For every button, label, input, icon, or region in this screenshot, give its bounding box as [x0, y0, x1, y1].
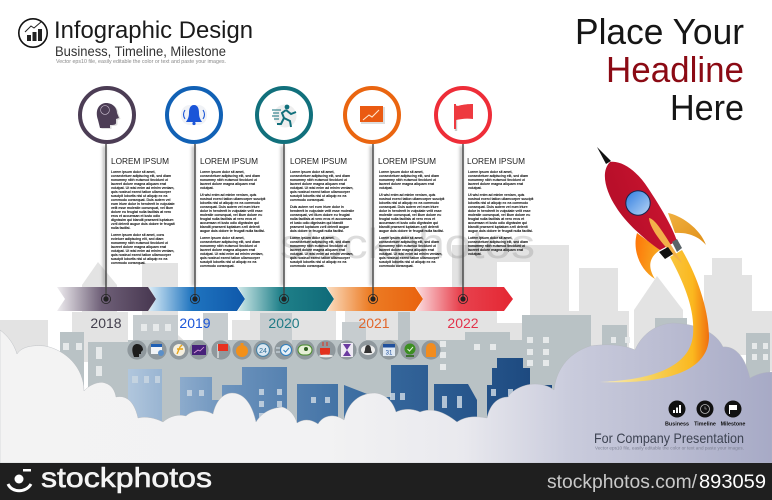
arrow 2020	[238, 287, 334, 311]
body text: Lorem ipsum dolor sit amet, consectetuer adipiscing elit, sed diam nonummy nibh euismod tincidunt ut laoreet dolore magna aliquam erat volutpat.	[379, 170, 439, 190]
background: light city skyline	[0, 245, 772, 380]
rocket flame	[600, 250, 709, 382]
year: 2022	[447, 315, 479, 331]
heading: LOREM IPSUM	[200, 157, 258, 166]
body text: Lorem ipsum dolor sit amet, consectetuer adipiscing elit, sed diam nonummy nibh euismod tincidunt ut laoreet dolore magna aliquam erat volutpat. Ut wisi enim ad minim veniam, quis nostrud exerci tation ullamcorper suscipit lobortis nisl ut aliquip ex ea commodo consequat. Duis autem vel eum iriure dolor in hendrerit in vulputate velit esse molestie consequat, vel illum dolore eu feugiat nulla facilisis at vero eros et accumsan et iusto odio dignissim qui blandit praesent luptatum zzril delenit augue duis dolore te feugait nulla facilisi.	[111, 170, 175, 230]
bottom-right badges	[665, 400, 745, 428]
heading: LOREM IPSUM	[378, 157, 436, 166]
rocket black nozzle	[659, 247, 673, 259]
timeline badge	[696, 400, 714, 418]
year: 2021	[358, 315, 390, 331]
ring	[436, 88, 490, 142]
marker	[368, 294, 378, 304]
arrow 2022	[416, 287, 513, 311]
year: 2018	[90, 315, 122, 331]
headline	[575, 11, 744, 128]
icon glyphs	[132, 342, 436, 358]
pole	[372, 144, 374, 299]
marker	[101, 294, 111, 304]
milestone 2021	[345, 88, 445, 331]
footer image id: 893059	[699, 472, 766, 493]
title: Infographic Design	[54, 17, 253, 44]
body text: Lorem ipsum dolor sit amet, consectetuer adipiscing elit, sed diam nonummy nibh euismod tincidunt ut laoreet dolore magna aliquam erat volutpat. Ut wisi enim ad minim veniam, quis nostrud exerci tation ullamcorper suscipit lobortis nisl ut aliquip ex ea commodo consequat.	[379, 236, 442, 268]
icon glyphs: 31	[386, 350, 393, 356]
ring	[257, 88, 311, 142]
headline: Place Your	[575, 11, 744, 52]
badge labels: Milestone	[721, 422, 745, 428]
pole shadows	[103, 146, 463, 286]
body text: Duis autem vel eum iriure dolor in hendrerit in vulputate velit esse molestie consequat, vel illum dolore eu feugiat nulla facilisis at vero eros et accumsan et iusto odio dignissim qui blandit praesent luptatum zzril delenit augue duis dolore te feugait nulla facilisi.	[290, 205, 354, 233]
year: 2019	[179, 315, 211, 331]
rocket centre fin	[649, 218, 682, 263]
ring	[167, 88, 221, 142]
icon: chart board	[360, 106, 385, 124]
arrow 2018	[57, 287, 156, 311]
background: blue foreground buildings	[128, 358, 552, 434]
rocket window	[626, 191, 650, 215]
badge labels: Timeline	[694, 422, 716, 428]
background: blue building windows	[132, 376, 513, 419]
rocket grey nozzle	[672, 239, 682, 252]
footer bar	[0, 462, 772, 500]
footer logo mark	[8, 469, 31, 491]
milestone badge	[724, 400, 742, 418]
marker	[458, 294, 468, 304]
body text: Lorem ipsum dolor sit amet, consectetuer adipiscing elit, sed diam nonummy nibh euismod tincidunt ut laoreet dolore magna aliquam erat volutpat. Ut wisi enim ad minim veniam, quis nostrud exerci tation ullamcorper suscipit lobortis nisl ut aliquip ex ea commodo consequat.	[290, 236, 353, 268]
body text	[200, 170, 266, 270]
icon badges	[127, 340, 441, 360]
body text	[468, 170, 534, 260]
body text: Lorem ipsum dolor sit amet, consectetuer adipiscing elit, sed diam nonummy nibh euismod tincidunt ut laoreet dolore magna aliquam erat volutpat.	[468, 236, 528, 256]
rocket left fin	[636, 233, 660, 279]
milestone 2020	[257, 88, 355, 331]
icon: bell	[181, 105, 207, 125]
body text	[379, 170, 445, 270]
pole	[462, 144, 464, 299]
body text: Lorem ipsum dolor sit amet, consectetuer adipiscing elit, sed diam nonummy nibh euismod tincidunt ut laoreet dolore magna aliquam erat volutpat. Ut wisi enim ad minim veniam, quis nostrud exerci tation ullamcorper suscipit lobortis nisl ut aliquip ex ea commodo consequat.	[290, 170, 353, 202]
company presentation heading: For Company Presentation	[594, 430, 744, 446]
icon glyphs: 24	[259, 348, 267, 355]
watermark: stockphotos: stockphotos	[280, 220, 535, 267]
body text: Ut wisi enim ad minim veniam, quis nostrud exerci tation ullamcorper suscipit lobortis nisl ut aliquip ex ea commodo consequat. Duis autem vel eum iriure dolor in hendrerit in vulputate velit esse molestie consequat, vel illum dolore eu feugiat nulla facilisis at vero eros et accumsan et iusto odio dignissim qui blandit praesent luptatum zzril delenit augue duis dolore te feugait nulla facilisi.	[379, 193, 444, 233]
badge labels	[665, 422, 745, 428]
background: building windows	[63, 324, 768, 376]
body text: Lorem ipsum dolor sit amet, cons ectetuer adipiscing elit, sed diam nonummy nibh euismod tincidunt ut laoreet dolore magna aliquam erat volutpat. Ut wisi enim ad minim veniam, quis nostrud exerci tation ullamcorper suscipit lobortis nisl ut aliquip ex ea commodo consequat.	[111, 233, 174, 265]
clouds: foreground bank	[0, 323, 772, 463]
body text: Lorem ipsum dolor sit amet, consectetuer adipiscing elit, sed diam nonummy nibh euismod tincidunt ut laoreet dolore magna aliquam erat volutpat.	[468, 170, 528, 190]
background: mid-tone grey buildings	[60, 312, 770, 430]
header icon: chart in circle	[19, 19, 47, 47]
rocket body	[605, 162, 677, 250]
marker	[190, 294, 200, 304]
ring	[80, 88, 134, 142]
heading: LOREM IPSUM	[467, 157, 525, 166]
icon: runner	[272, 104, 296, 128]
subtitle: Business, Timeline, Milestone	[55, 43, 226, 59]
body text: Ut wisi enim ad minim veniam, quis nostrud exerci tation ullamcorper suscipit lobortis nisl ut aliquip ex ea commodo consequat. Duis autem vel eum iriure dolor in hendrerit in vulputate velit esse molestie consequat, vel illum dolore eu feugiat nulla facilisis at vero eros et accumsan et iusto odio dignissim qui blandit praesent luptatum zzril delenit augue duis dolore te feugait nulla facilisi.	[468, 193, 533, 233]
milestone 2018	[80, 88, 175, 331]
pole	[283, 144, 285, 299]
icon: head	[97, 103, 120, 129]
marker	[279, 294, 289, 304]
business badge	[668, 400, 686, 418]
heading: LOREM IPSUM	[290, 157, 347, 166]
timeline arrows	[57, 287, 513, 311]
body text: Lorem ipsum dolor sit amet, consectetuer adipiscing elit, sed diam nonummy nibh euismod tincidunt ut laoreet dolore magna aliquam erat volutpat.	[200, 170, 260, 190]
company tagline: Vector eps10 file, easily editable the color or text and paste your images.	[595, 446, 744, 452]
body text: Ut wisi enim ad minim veniam, quis nostrud exerci tation ullamcorper suscipit lobortis nisl ut aliquip ex ea commodo consequat. Duis autem vel eum iriure dolor in hendrerit in vulputate velit esse molestie consequat, vel illum dolore eu feugiat nulla facilisis at vero eros et accumsan et iusto odio dignissim qui blandit praesent luptatum zzril delenit augue duis dolore te feugait nulla facilisi.	[200, 193, 265, 233]
milestone 2019	[167, 88, 266, 331]
body text	[111, 170, 175, 270]
footer logo text: stockphotos	[41, 462, 212, 493]
rocket antenna	[597, 147, 611, 164]
rocket right fin	[668, 213, 706, 245]
rocket	[597, 147, 709, 382]
icon: flag	[455, 104, 473, 131]
badge labels: Business	[665, 422, 689, 428]
heading: LOREM IPSUM	[111, 157, 169, 166]
headline: Here	[670, 87, 744, 128]
tagline: Vector eps10 file, easily editable the color or text and paste your images.	[56, 59, 226, 65]
footer url: stockphotos.com/	[547, 472, 698, 493]
headline: Headline	[606, 49, 744, 90]
body text	[290, 170, 355, 270]
pole	[105, 144, 107, 299]
pole	[194, 144, 196, 299]
body text: Lorem ipsum dolor sit amet, consectetuer adipiscing elit, sed diam nonummy nibh euismod tincidunt ut laoreet dolore magna aliquam erat volutpat. Ut wisi enim ad minim veniam, quis nostrud exerci tation ullamcorper suscipit lobortis nisl ut aliquip ex ea commodo consequat.	[200, 236, 263, 268]
ring	[345, 88, 399, 142]
icon row	[127, 340, 441, 360]
arrow 2019	[149, 287, 245, 311]
arrow 2021	[327, 287, 423, 311]
year: 2020	[268, 315, 300, 331]
milestone 2022	[436, 88, 534, 331]
